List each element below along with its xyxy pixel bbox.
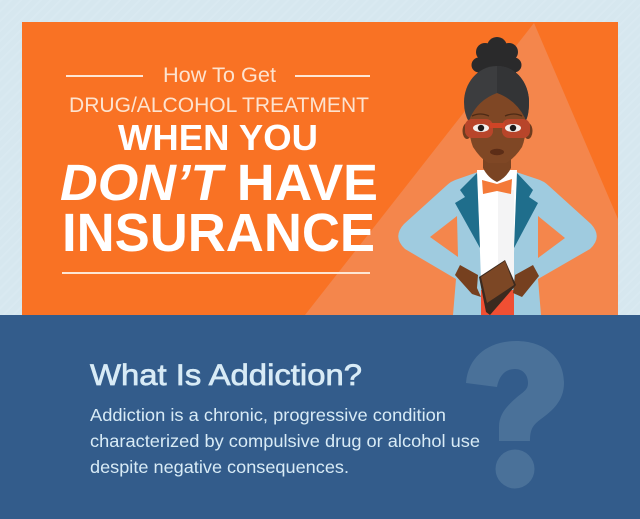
body text: despite negative consequences. (90, 457, 349, 477)
bun (472, 37, 522, 76)
panel: what is addiction (0, 315, 640, 519)
icon: question mark (466, 341, 564, 488)
neck (483, 150, 511, 182)
title rule left (66, 75, 143, 77)
subtitle: DRUG/ALCOHOL TREATMENT (69, 94, 369, 117)
arm gap right (538, 216, 565, 258)
arm gap left (430, 216, 458, 257)
body text (90, 405, 480, 477)
eye right (505, 124, 521, 132)
eye left (473, 124, 489, 132)
ears (462, 123, 472, 139)
section heading: What Is Addiction? (90, 359, 362, 392)
mouth (490, 149, 504, 155)
title block (60, 64, 378, 274)
hair (464, 66, 529, 122)
shirt (477, 170, 517, 280)
spotlight triangle (305, 23, 618, 315)
illustration: woman holding empty wallet (398, 37, 597, 315)
jacket (398, 172, 597, 315)
face (469, 93, 526, 163)
panel: orange hero (22, 22, 618, 315)
title rule right (295, 75, 370, 77)
lapel right (514, 173, 538, 248)
hand right (513, 265, 539, 297)
heading line 2: DON’T HAVE (60, 154, 378, 211)
lapel left (455, 173, 480, 248)
title rule bottom (62, 272, 370, 274)
tie (481, 290, 514, 315)
brows (472, 114, 522, 116)
wallet (479, 260, 516, 315)
heading line 3: INSURANCE (62, 203, 375, 263)
hand left (455, 265, 481, 297)
heading line 1: WHEN YOU (118, 117, 318, 158)
bow tie (482, 179, 512, 194)
kicker: How To Get (163, 64, 276, 87)
glasses (465, 119, 530, 138)
body text: Addiction is a chronic, progressive condition (90, 405, 446, 425)
body text: characterized by compulsive drug or alcohol use (90, 431, 480, 451)
